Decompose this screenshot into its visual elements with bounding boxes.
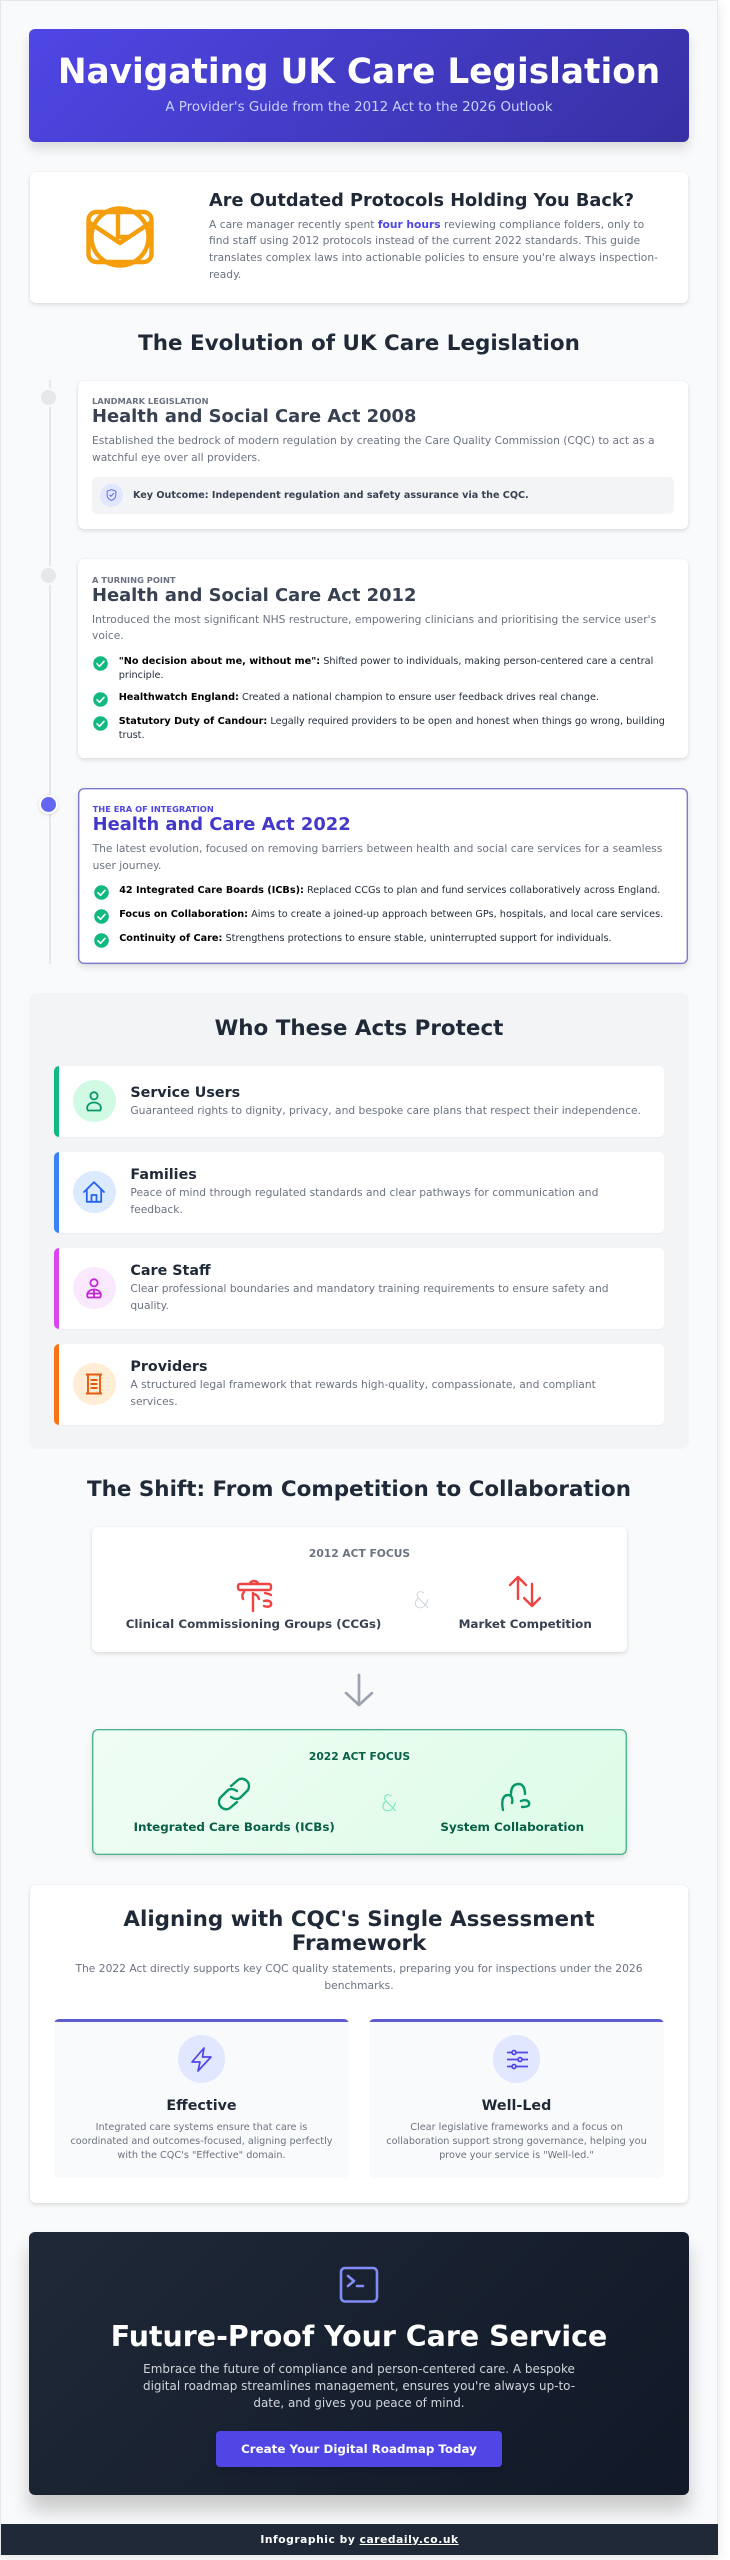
ampersand: & <box>380 1792 398 1817</box>
intro text: The 2022 Act directly supports key CQC quality statements, preparing you for inspections under the 2026 <box>76 1962 642 1975</box>
key outcome box <box>92 477 674 514</box>
card: well-led <box>369 2019 664 2178</box>
list item: 42 Integrated Care Boards (ICBs): Replaced CCGs to plan and fund services collaboratively across England. <box>119 885 660 896</box>
item text: Peace of mind through regulated standards and clear pathways for communication and <box>130 1186 598 1199</box>
list item: Statutory Duty of Candour: Legally required providers to be open and honest when things go wrong, building <box>119 716 665 726</box>
item text: A structured legal framework that rewards high-quality, compassionate, and compliant <box>130 1378 596 1391</box>
intro text <box>75 1962 642 1992</box>
subtitle: A Provider's Guide from the 2012 Act to the 2026 Outlook <box>165 100 553 115</box>
footer <box>1 2524 718 2555</box>
CTA text: Embrace the future of compliance and person-centered care. A bespoke <box>143 2362 575 2376</box>
item: care staff <box>54 1248 664 1329</box>
accent bar <box>54 1344 59 1425</box>
panel: 2012 act focus <box>92 1527 627 1652</box>
accent bar <box>54 1248 59 1329</box>
icon: arrows up down <box>508 1576 542 1608</box>
label: market competition: Market Competition <box>459 1617 592 1631</box>
icon: clock envelope <box>86 206 154 268</box>
panel: Act 2022 <box>78 788 688 964</box>
list item <box>119 656 653 681</box>
card text: with the CQC's "Effective" domain. <box>117 2150 286 2161</box>
icon: check <box>94 933 109 948</box>
arrow: down <box>344 1674 374 1706</box>
card title: Well-Led <box>482 2098 551 2114</box>
icon: check <box>93 716 108 731</box>
CTA text <box>143 2362 575 2410</box>
eyebrow: LANDMARK LEGISLATION <box>92 396 209 406</box>
CTA text: date, and gives you peace of mind. <box>253 2396 465 2410</box>
panel label: 2022 ACT FOCUS <box>309 1750 410 1763</box>
eyebrow: THE ERA OF INTEGRATION <box>93 804 214 814</box>
icon: check <box>94 909 109 924</box>
title: Navigating UK Care Legislation <box>58 52 660 92</box>
label: system collaboration: System Collaboration <box>440 1820 584 1834</box>
card text: Clear legislative frameworks and a focus on <box>410 2122 623 2133</box>
ampersand: & <box>413 1589 430 1614</box>
eyebrow: A TURNING POINT <box>92 575 176 585</box>
item text: services. <box>130 1395 178 1408</box>
label: ICBs: Integrated Care Boards (ICBs) <box>134 1820 335 1834</box>
description: Established the bedrock of modern regulation by creating the Care Quality Commission (CQC) to act as a <box>92 434 655 447</box>
icon: CCGs <box>236 1580 272 1612</box>
item title: Providers <box>130 1359 207 1375</box>
card text <box>70 2122 333 2161</box>
description: user journey. <box>93 859 161 872</box>
icon: check <box>93 692 108 707</box>
description <box>92 613 656 642</box>
panel: call to action <box>29 2232 689 2495</box>
panel: Act 2008 <box>78 381 688 529</box>
list item: Continuity of Care: Strengthens protections to ensure stable, uninterrupted support for individuals. <box>119 933 612 944</box>
list item: trust. <box>119 730 145 741</box>
hook text <box>209 218 658 281</box>
panel label: 2012 ACT FOCUS <box>309 1547 410 1560</box>
icon: terminal <box>340 2266 378 2303</box>
hook text: ready. <box>209 268 241 281</box>
item text <box>130 1378 596 1408</box>
act title: Health and Care Act 2022 <box>93 814 351 835</box>
item title: Service Users <box>130 1085 240 1101</box>
list item: "No decision about me, without me": Shifted power to individuals, making person-centered care a central <box>119 656 653 666</box>
key outcome text: Key Outcome: Independent regulation and safety assurance via the CQC. <box>133 490 529 501</box>
list item: Healthwatch England: Created a national champion to ensure user feedback drives real change. <box>119 692 599 702</box>
section heading: evolution: The Evolution of UK Care Legislation <box>138 331 580 356</box>
CTA text: digital roadmap streamlines management, ensures you're always up-to- <box>143 2379 575 2393</box>
icon: shield check <box>100 484 122 507</box>
section heading: Who These Acts Protect <box>215 1016 503 1041</box>
footer: Infographic by caredaily.co.uk <box>260 2533 459 2546</box>
accent bar <box>54 1152 59 1233</box>
card text: Integrated care systems ensure that care is <box>96 2122 307 2133</box>
timeline dot 2022 <box>39 794 58 814</box>
card text: collaboration support strong governance, helping you <box>386 2136 647 2147</box>
act title: Health and Social Care Act 2012 <box>92 585 416 606</box>
icon: check <box>93 656 108 671</box>
item: service users <box>54 1066 664 1137</box>
card title: Effective <box>166 2098 237 2114</box>
accent bar <box>54 1066 59 1137</box>
hook heading: Are Outdated Protocols Holding You Back? <box>209 191 634 211</box>
panel: Act 2012 <box>78 559 688 758</box>
panel: CQC single assessment framework <box>30 1885 688 2203</box>
section heading <box>123 1907 595 1956</box>
card: effective <box>54 2019 349 2178</box>
icon: lightning <box>178 2035 225 2083</box>
item text: quality. <box>130 1299 169 1312</box>
item text <box>130 1186 598 1216</box>
icon: building <box>73 1363 116 1405</box>
item: families <box>54 1152 664 1233</box>
timeline dot 2008 <box>39 388 58 406</box>
label: CCGs: Clinical Commissioning Groups (CCGs) <box>126 1617 381 1631</box>
description: voice. <box>92 629 124 642</box>
item text <box>130 1282 609 1312</box>
CTA button <box>216 2431 502 2467</box>
top accent <box>54 2019 349 2022</box>
icon: collaboration <box>501 1782 530 1812</box>
item title: Care Staff <box>130 1263 211 1279</box>
CTA button: Create Your Digital Roadmap Today <box>241 2442 477 2456</box>
item title: Families <box>130 1167 197 1183</box>
list item: Focus on Collaboration: Aims to create a joined-up approach between GPs, hospitals, and local care services. <box>119 909 663 920</box>
card text: prove your service is "Well-led." <box>439 2150 594 2161</box>
description: watchful eye over all providers. <box>92 451 261 464</box>
card text <box>386 2122 647 2161</box>
timeline line <box>48 380 51 964</box>
item text: Guaranteed rights to dignity, privacy, and bespoke care plans that respect their independence. <box>130 1104 641 1117</box>
timeline dot 2012 <box>39 566 58 584</box>
item text: Clear professional boundaries and mandatory training requirements to ensure safety and <box>130 1282 609 1295</box>
hook text: translates complex laws into actionable policies to ensure you're always inspection- <box>209 251 658 264</box>
description: The latest evolution, focused on removing barriers between health and social care services for a seamless <box>93 842 662 855</box>
icon: link <box>218 1778 250 1810</box>
icon: person <box>73 1080 116 1122</box>
section heading: Aligning with CQC's Single Assessment <box>123 1907 595 1932</box>
panel: 2022 act focus <box>92 1729 627 1855</box>
description: Introduced the most significant NHS restructure, empowering clinicians and prioritising the service user's <box>92 613 656 626</box>
description <box>92 842 662 872</box>
icon: home <box>73 1171 116 1213</box>
hook text: find staff using 2012 protocols instead of the current 2022 standards. This guide <box>209 234 640 247</box>
icon: check <box>94 885 109 900</box>
list item <box>119 716 665 741</box>
icon: care staff <box>73 1267 116 1309</box>
CTA heading: Future-Proof Your Care Service <box>111 2320 607 2353</box>
panel: hook card <box>30 172 688 303</box>
description <box>92 434 655 464</box>
panel: who these acts protect <box>29 993 689 1449</box>
card text: coordinated and outcomes-focused, aligning perfectly <box>70 2136 333 2147</box>
hook text: A care manager recently spent four hours reviewing compliance folders, only to <box>209 218 644 231</box>
section heading: Framework <box>292 1931 426 1956</box>
section heading: the shift: The Shift: From Competition to Collaboration <box>87 1477 631 1502</box>
list item: principle. <box>119 670 164 681</box>
header banner <box>29 29 689 142</box>
item text: feedback. <box>130 1203 183 1216</box>
act title: Health and Social Care Act 2008 <box>92 406 416 427</box>
top accent <box>369 2019 664 2022</box>
icon: sliders <box>493 2035 540 2083</box>
item: providers <box>54 1344 664 1425</box>
intro text: benchmarks. <box>324 1979 394 1992</box>
